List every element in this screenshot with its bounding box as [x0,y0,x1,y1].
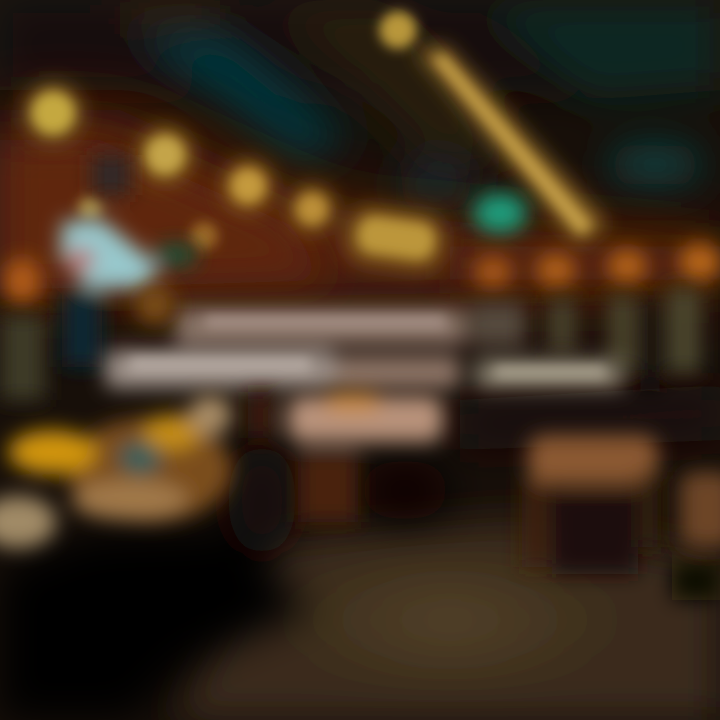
left table with yellow items [0,285,232,548]
pendant lights row [32,92,436,261]
counter highlight [130,316,605,378]
ceiling light strip highlight [379,11,592,234]
central table [248,392,443,522]
ceiling: dark with muted teal panels [0,0,720,210]
lower-left dark foreground [0,445,450,720]
colourful hanging decoration [60,155,198,367]
floor [170,385,720,720]
teal glowing sign [473,193,527,233]
wall band: warm reddish brown [0,110,720,300]
pendant light halos [23,83,449,275]
central white counter [105,302,623,388]
columns [0,288,700,400]
right wooden table [522,435,658,574]
orange lanterns right [3,243,720,304]
ceiling light strip [415,45,608,245]
far right chair [672,472,720,600]
